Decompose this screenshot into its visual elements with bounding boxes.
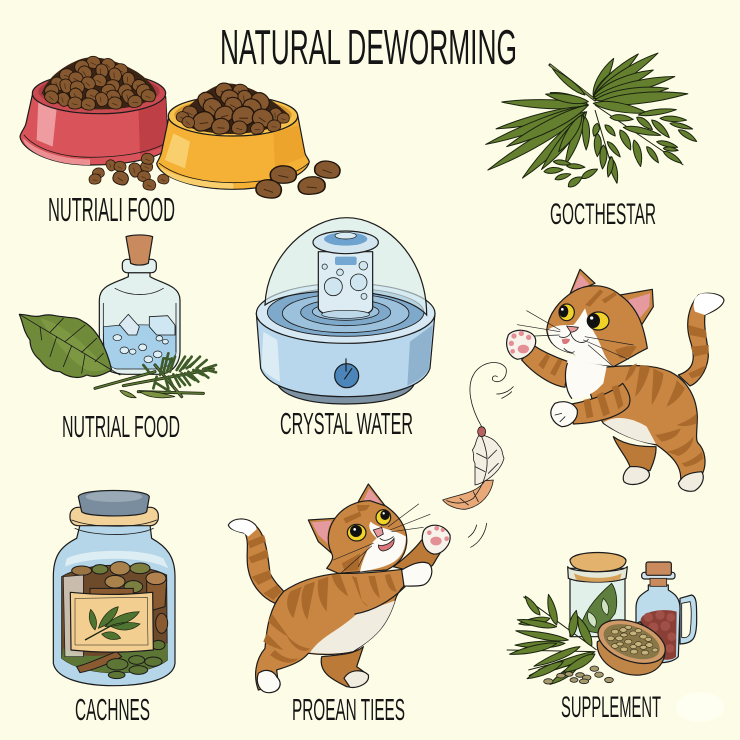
cat head	[308, 484, 430, 573]
herb seeds	[544, 159, 599, 189]
panel: food bowls	[20, 55, 341, 200]
panel: spice jar	[53, 490, 175, 686]
feather toy string	[470, 363, 513, 427]
dial knob	[335, 358, 359, 388]
icon: yellow bowl	[157, 96, 309, 189]
icon: glass bottle	[99, 235, 180, 374]
cat head	[517, 269, 653, 367]
jar neck ring	[72, 520, 157, 535]
glass filter column	[313, 231, 378, 318]
glass dome	[265, 218, 427, 315]
icon: bottle of seeds	[636, 562, 697, 663]
cat hind legs	[613, 437, 656, 484]
water	[267, 288, 424, 336]
yellow bowl kibble pile	[175, 82, 289, 136]
jar glass body	[53, 525, 175, 686]
cat belly	[603, 418, 656, 444]
cat tail	[678, 293, 724, 386]
jar contents	[62, 562, 168, 679]
text: PROEAN TIEES	[292, 692, 405, 727]
cat raised arm	[393, 525, 450, 570]
cat belly	[310, 601, 395, 654]
cat raised arm	[507, 330, 568, 387]
cat chest	[565, 357, 607, 399]
herb branch leaves	[582, 105, 698, 184]
text: NUTRIALI FOOD	[48, 191, 175, 228]
cat body	[256, 569, 404, 690]
cat body	[587, 366, 705, 480]
panel: crystal water fountain	[256, 218, 435, 404]
icon: stick	[550, 65, 595, 100]
label: Crystal Water: CRYSTAL WATER	[280, 406, 413, 441]
dark base	[277, 382, 415, 404]
motion lines	[468, 523, 487, 547]
panel: supplements	[507, 552, 697, 688]
feather	[443, 427, 504, 509]
jar shoulder glass	[65, 551, 168, 568]
cat hind paw	[257, 670, 280, 693]
panel: playing cat with feather	[443, 269, 724, 509]
cat body stripes	[263, 574, 397, 663]
red bowl kibble pile	[42, 55, 157, 111]
label: Nutrial Food: NUTRIAL FOOD	[62, 409, 180, 444]
jar cork collar	[70, 507, 158, 526]
jar lid top	[86, 491, 142, 502]
icon: large green leaf	[19, 314, 120, 377]
text: CACHNES	[75, 692, 150, 727]
cat arm underline	[355, 587, 405, 614]
icon: rosemary sprig	[95, 353, 216, 398]
pale corner patch	[676, 692, 724, 722]
basin shading	[262, 325, 433, 386]
icon: green herb branch	[507, 594, 597, 688]
icon: red bowl	[20, 73, 168, 165]
cat body stripes	[625, 363, 703, 467]
panel: water bottle with herbs	[19, 235, 216, 398]
large spilled kibble	[255, 159, 341, 200]
basin body	[256, 313, 435, 397]
cat front arm paw	[402, 562, 432, 586]
icon: wooden seed bowl	[592, 612, 671, 675]
cat hind paw	[678, 472, 703, 491]
cat second hind leg	[321, 647, 368, 687]
icon: glass jar with leaves	[568, 552, 627, 637]
spilled kibble	[89, 152, 170, 191]
panel: herb sprig	[484, 48, 698, 189]
herb leaves	[484, 48, 688, 182]
cat tail	[228, 519, 284, 603]
panel: second playing cat	[228, 484, 487, 693]
cat front arm	[551, 383, 630, 427]
jar lid	[78, 490, 149, 516]
jar paper label	[70, 592, 153, 652]
basin rim	[256, 283, 435, 343]
spilled seeds	[544, 666, 613, 684]
